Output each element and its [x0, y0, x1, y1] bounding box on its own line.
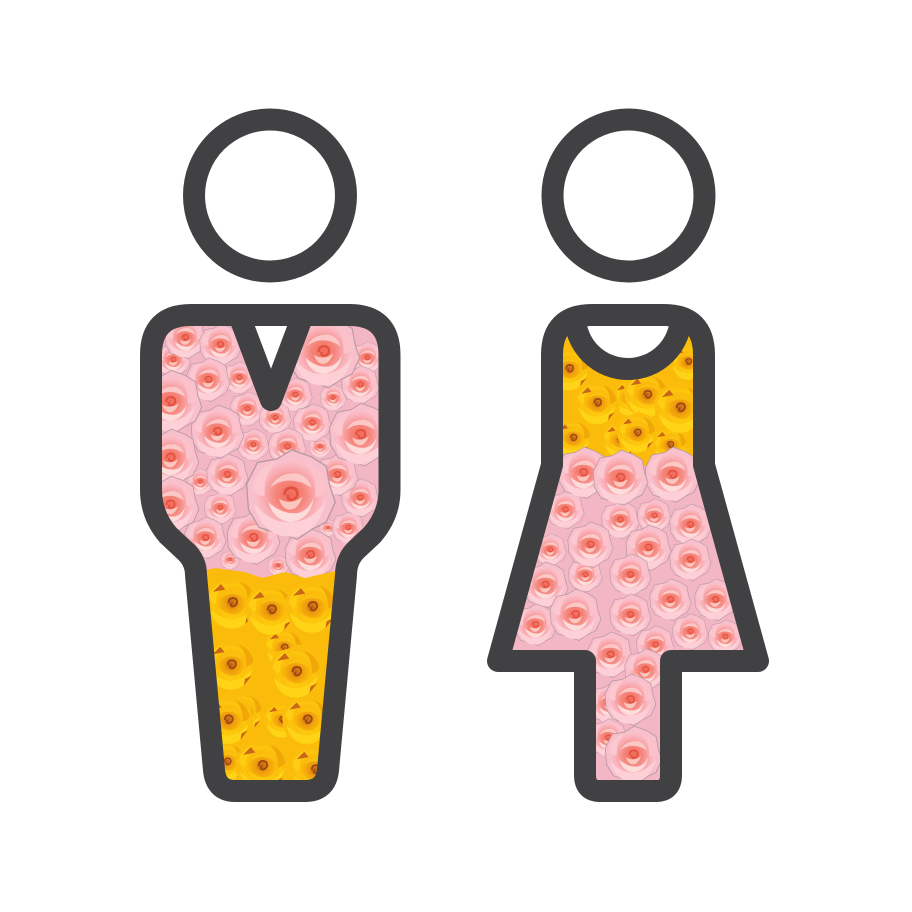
man rose fill	[162, 326, 378, 780]
man collar opening	[250, 322, 292, 376]
man figure	[140, 120, 400, 800]
man yellow trousers	[206, 568, 336, 780]
woman yellow bodice	[563, 336, 693, 466]
woman pink skirt	[512, 446, 744, 780]
woman figure	[490, 120, 760, 800]
woman head ring	[552, 120, 704, 272]
woman neckline	[575, 316, 681, 369]
man body outline	[151, 315, 390, 791]
woman rose fill	[512, 336, 744, 780]
woman neck opening	[575, 316, 681, 369]
man V collar	[239, 315, 303, 400]
woman body outline	[498, 315, 758, 791]
man head ring	[194, 120, 346, 272]
